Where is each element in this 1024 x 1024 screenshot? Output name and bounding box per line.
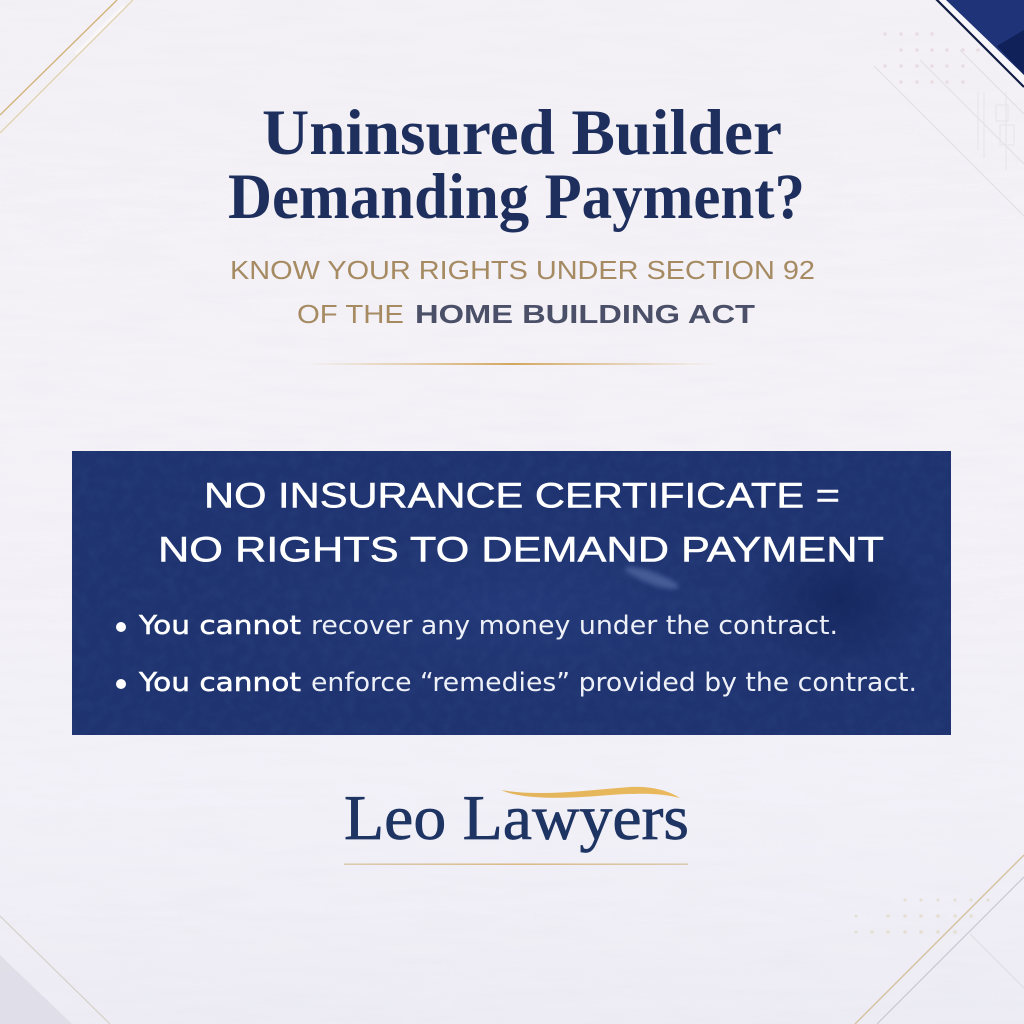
bullet: recover money: recover any money under the contract. (311, 611, 838, 641)
title: Uninsured Builder (262, 97, 782, 169)
bullet: enforce remedies: enforce “remedies” provided by the contract. (311, 668, 917, 698)
title (228, 97, 805, 233)
top-right corner navy accent (936, 0, 1024, 87)
logo wordmark: Leo Lawyers (344, 782, 689, 853)
bottom-right corner lines and dots (854, 855, 1024, 1024)
top-right architectural pattern (874, 32, 1024, 216)
panel background (72, 451, 951, 735)
title: Demanding Payment? (228, 161, 805, 233)
panel heading (158, 476, 884, 570)
subtitle: HOME BUILDING ACT (415, 301, 756, 329)
logo swoosh (501, 787, 680, 798)
logo: Leo Lawyers (344, 782, 689, 865)
logo underline (344, 864, 688, 865)
top-left corner gold lines (0, 0, 133, 133)
bullet: recover money: You cannot (138, 611, 301, 641)
bullet: enforce remedies: You cannot (138, 668, 301, 698)
gold divider (305, 363, 720, 365)
bullet: recover money (116, 611, 838, 641)
panel: no insurance certificate (72, 451, 951, 735)
panel heading: NO INSURANCE CERTIFICATE = (204, 476, 840, 516)
subtitle: KNOW YOUR RIGHTS UNDER SECTION 92 (230, 257, 815, 285)
panel heading: NO RIGHTS TO DEMAND PAYMENT (158, 530, 884, 570)
subtitle: OF THE (297, 301, 404, 329)
bottom-left corner accent (0, 916, 110, 1024)
subtitle (230, 257, 815, 329)
